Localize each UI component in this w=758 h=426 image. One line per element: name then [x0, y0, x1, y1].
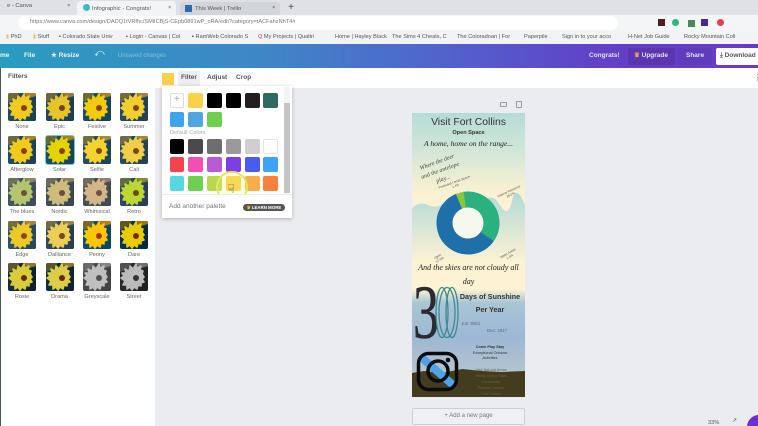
tab: Filter: Filter [181, 74, 197, 81]
filter: Cali: Cali [129, 167, 139, 173]
undo arrow: ⤺ [94, 48, 105, 59]
bookmarks bar: ▮ PhD [6, 34, 22, 40]
browser tab strip [0, 0, 758, 15]
footer text on ground: Horsetooth [482, 380, 500, 384]
donut chart [436, 192, 500, 254]
divider and palette footer [162, 194, 292, 218]
bookmarks bar: Paperpile [524, 34, 548, 40]
icon: instagram camera [416, 352, 458, 392]
bookmarks bar: H-Net Job Guide [628, 34, 670, 40]
filter: Dare: Dare [128, 252, 140, 258]
bookmarks bar: Sign in to your acco [562, 34, 611, 40]
label: protected lands: 1.4% [452, 183, 460, 189]
label: water: Water Areas [499, 247, 516, 259]
add colour button [170, 93, 184, 108]
add palette text: Add another palette [169, 203, 226, 210]
button: Download [716, 48, 758, 65]
bookmarks bar [0, 31, 758, 44]
menu: Home: me [0, 52, 9, 59]
document swatches [170, 93, 278, 127]
handwritten quote: play... [436, 174, 451, 185]
add new page button: + Add a new page [444, 413, 493, 419]
scrollbar [284, 87, 290, 194]
page action icons [500, 101, 522, 108]
footer text on ground: Visit Natural Areas [475, 368, 507, 372]
cursor highlight ring [216, 171, 248, 203]
footer text on ground: Fort Collins [481, 392, 501, 396]
filter: Rosie: Rosie [15, 294, 29, 300]
button: Upgrade: ♛ Upgrade [634, 52, 668, 59]
sunshine heading [460, 292, 520, 314]
help button [747, 415, 758, 426]
filter: Afterglow [8, 136, 36, 173]
menu: File: File [24, 52, 35, 59]
handwritten quote [419, 154, 460, 185]
filter: Drama [46, 263, 74, 300]
learn more pill [243, 204, 285, 211]
extension icons [658, 19, 724, 27]
filter: Edge: Edge [15, 252, 29, 258]
bookmarks bar: Home | Hayley Black [335, 34, 387, 40]
tab: Trello: This Week | Trello [195, 6, 241, 12]
tab: Trello [180, 2, 280, 15]
infographic poster [412, 113, 525, 397]
filter grid [8, 93, 148, 300]
filter: Cali [120, 136, 148, 173]
sunshine heading: Per Year [476, 305, 504, 314]
filter: The blues [8, 178, 36, 215]
filter: Drama: Drama [51, 294, 68, 300]
tab: Infographic, active [77, 1, 176, 15]
cursor hand: ☟ [227, 182, 235, 196]
tab: Canva: × [67, 3, 70, 9]
secondary toolbar [155, 68, 758, 88]
zoom level: 33% [708, 420, 719, 426]
button: Share: Share [686, 52, 704, 59]
filter: Whimsical [83, 178, 111, 215]
bookmarks bar: The Coloradoan | For [457, 34, 510, 40]
filter: Festive [83, 93, 111, 130]
scrollbar thumb [284, 103, 290, 193]
handwritten skies line: And the skies are not cloudy all [418, 263, 519, 272]
menu: Resize: ★ Resize [51, 52, 79, 59]
button: Share [678, 48, 712, 65]
bookmarks bar: ▮ Stuff [33, 34, 49, 40]
filter: Peony [83, 221, 111, 258]
filter: Nordic [46, 178, 74, 215]
label: natural resource: Natural Resource [497, 184, 521, 198]
bookmarks bar: The Sims 4 Cheats, C [392, 34, 447, 40]
invitation text [473, 345, 508, 360]
invitation text: Activities [482, 356, 497, 360]
filter: Afterglow: Afterglow [10, 167, 34, 173]
filter: None [8, 93, 36, 130]
footer text on ground: Poudre Canyon [478, 386, 504, 390]
label: protected lands: Protected Lands Space [438, 175, 470, 190]
tab: Adjust: Adjust [207, 74, 227, 81]
june figure: Jun: 8951 [461, 321, 480, 326]
heading: default colours: Default Colors [170, 130, 205, 136]
url text: https://www.canva.com/design/DADQ1tVRfhc/SMiICBjS-CEpb0891wP_oRA/edit?category=tACFahzNhT4# [30, 19, 295, 25]
colour swatch [162, 73, 174, 85]
expand arrow: ↗ [732, 418, 737, 424]
filter: Epic: Epic [54, 124, 65, 130]
app header bar [0, 44, 758, 68]
filter: Summer [120, 93, 148, 130]
bookmarks bar: ▪ Colorado State Univ [59, 34, 113, 40]
filter: Whimsical: Whimsical [84, 209, 110, 215]
filter: Summer: Summer [123, 124, 145, 130]
bookmarks bar: Q My Projects | Qualtri [258, 34, 314, 40]
filter: Solar, selected [45, 135, 75, 173]
filter: Retro: Retro [127, 209, 141, 215]
filter: None: None [15, 124, 29, 130]
filter: Greyscale: Greyscale [84, 294, 110, 300]
poster background [412, 192, 525, 397]
label: open [433, 253, 445, 264]
handwritten quote: and the antelope [420, 161, 460, 181]
tab: Crop: Crop [236, 74, 251, 81]
filter: Dalliance [46, 221, 74, 258]
handwritten skies line [418, 263, 519, 286]
filter: Dare [120, 221, 148, 258]
filter: Dalliance: Dalliance [48, 252, 71, 258]
label: water: 1.4% [506, 254, 514, 261]
tagline: A home, home on the range... [424, 139, 513, 148]
filter: Street [120, 263, 148, 300]
invitation text: Exceptional Outdoor [473, 351, 507, 355]
button: Upgrade [628, 48, 675, 65]
filter: Street: Street [127, 294, 141, 300]
default swatches [170, 139, 278, 191]
filter: Selfie: Selfie [90, 167, 104, 173]
button: Download: ⤓ Download [720, 52, 756, 59]
label: natural resource: 36.5% [506, 191, 516, 199]
bookmarks bar: ▪ RamWeb Colorado S [192, 34, 248, 40]
panel heading: Filters [8, 73, 28, 80]
left window edge [0, 68, 1, 426]
new tab button: + [288, 2, 294, 13]
save status: Unsaved changes [118, 53, 166, 59]
label: open: 57.6% [435, 256, 445, 264]
tab: Canva: e - Canva [7, 3, 32, 9]
label: open: Open [433, 253, 442, 260]
filter: Nordic: Nordic [51, 209, 68, 215]
invitation text: Come Play Stay [476, 345, 504, 349]
filter: Epic [46, 93, 74, 130]
filter: Greyscale [83, 263, 111, 300]
filter: Festive: Festive [88, 124, 106, 130]
filter: The blues: The blues [10, 209, 34, 215]
footer text on ground: Hiking Biking Trails [475, 374, 507, 378]
add colour button: + [174, 94, 180, 105]
bookmarks bar: ▪ Login - Canvas | Col [126, 34, 180, 40]
address bar [0, 15, 758, 31]
filter: Selfie [83, 136, 111, 173]
handwritten quote: Where the deer [419, 154, 455, 172]
tab: Canva [7, 3, 70, 9]
add new page button [412, 408, 525, 425]
poster title: Visit Fort Collins [431, 117, 506, 128]
footer text on ground [475, 368, 507, 396]
tab: Infographic, active: × [168, 5, 171, 11]
filter: Retro [120, 178, 148, 215]
bookmarks bar: Rocky Mountain Coll [684, 34, 735, 40]
url field [18, 16, 618, 30]
handwritten skies line: day [463, 277, 474, 286]
learn more pill: ♛ LEARN MORE [247, 205, 281, 210]
tab: Filter [178, 71, 200, 86]
filter: Solar, selected: Solar [53, 167, 66, 173]
tab: Trello: × [272, 5, 275, 11]
sunshine heading: Days of Sunshine [460, 292, 520, 301]
tab: Infographic, active: Infographic - Congrats! [92, 6, 151, 12]
december figure: Dec: 4917 [487, 328, 507, 333]
filter: Edge [8, 221, 36, 258]
filter: Rosie [8, 263, 36, 300]
colour picker popup [162, 86, 292, 218]
filter: Peony: Peony [89, 252, 105, 258]
filters panel [1, 68, 155, 426]
subtitle: Open Space [452, 130, 485, 136]
link: Congrats: Congrats! [589, 52, 620, 59]
